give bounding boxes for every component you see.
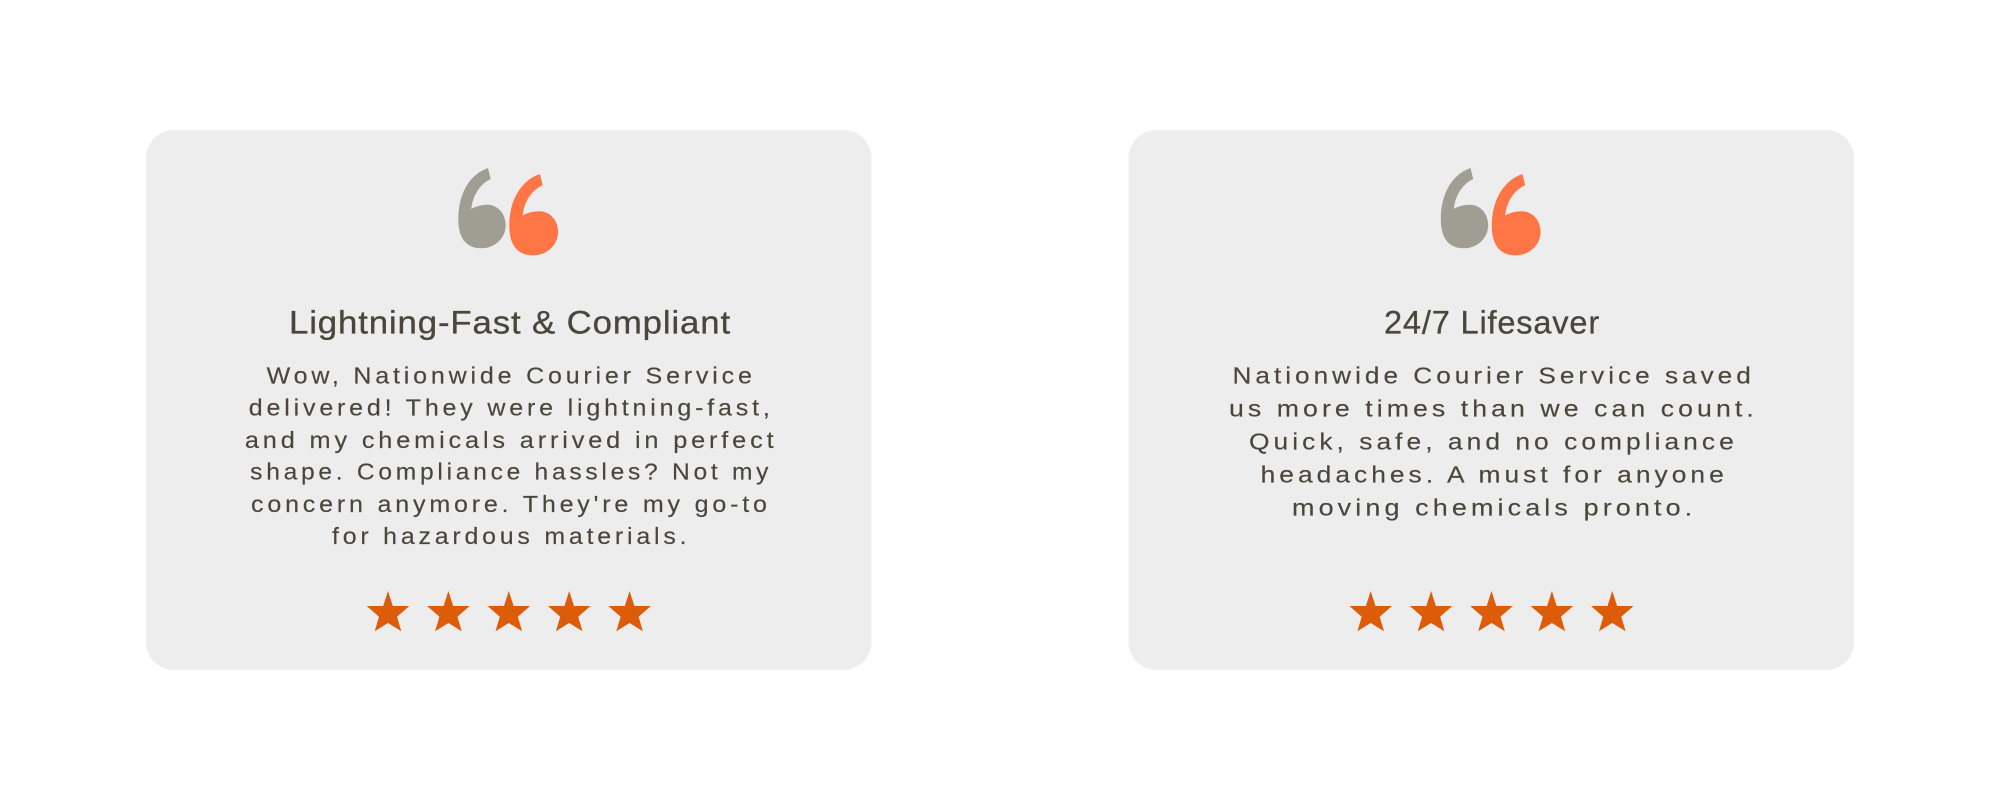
text block: card 1 quote: and my chemicals arrived in perfect bbox=[245, 427, 777, 453]
text block: card 1 quote: shape. Compliance hassles? Not my bbox=[250, 459, 772, 485]
text block: card 2 quote: us more times than we can count. bbox=[1229, 395, 1758, 421]
text block: card 1 quote bbox=[245, 362, 777, 549]
panel: testimonial card 2 bbox=[1128, 130, 1854, 670]
icon: five star rating bbox=[1349, 591, 1634, 631]
icon: five star rating bbox=[367, 591, 651, 631]
card background bbox=[146, 130, 872, 670]
grey quote mark bbox=[1441, 168, 1488, 248]
text block: card 2 quote: headaches. A must for anyone bbox=[1261, 461, 1728, 487]
text block: card 1 quote: for hazardous materials. bbox=[332, 523, 690, 549]
text block: card 2 quote: moving chemicals pronto. bbox=[1292, 494, 1696, 520]
panel: testimonial card 1 bbox=[146, 130, 872, 670]
icon: quotation marks bbox=[1441, 168, 1541, 255]
heading: card 2 title: 24/7 Lifesaver bbox=[1384, 304, 1600, 340]
icon: quotation marks bbox=[458, 168, 558, 255]
text block: card 1 quote: delivered! They were lightning-fast, bbox=[249, 395, 774, 421]
text block: card 2 quote bbox=[1229, 362, 1758, 520]
text block: card 2 quote: Nationwide Courier Service saved bbox=[1232, 362, 1755, 388]
text block: card 1 quote: concern anymore. They're my go-to bbox=[251, 491, 771, 517]
text block: card 2 quote: Quick, safe, and no compliance bbox=[1249, 428, 1738, 454]
card background bbox=[1128, 130, 1854, 670]
heading: card 1 title: Lightning-Fast & Compliant bbox=[289, 304, 731, 340]
orange quote mark bbox=[509, 174, 558, 255]
orange quote mark bbox=[1492, 174, 1541, 255]
grey quote mark bbox=[458, 168, 506, 248]
text block: card 1 quote: Wow, Nationwide Courier Service bbox=[267, 362, 756, 388]
